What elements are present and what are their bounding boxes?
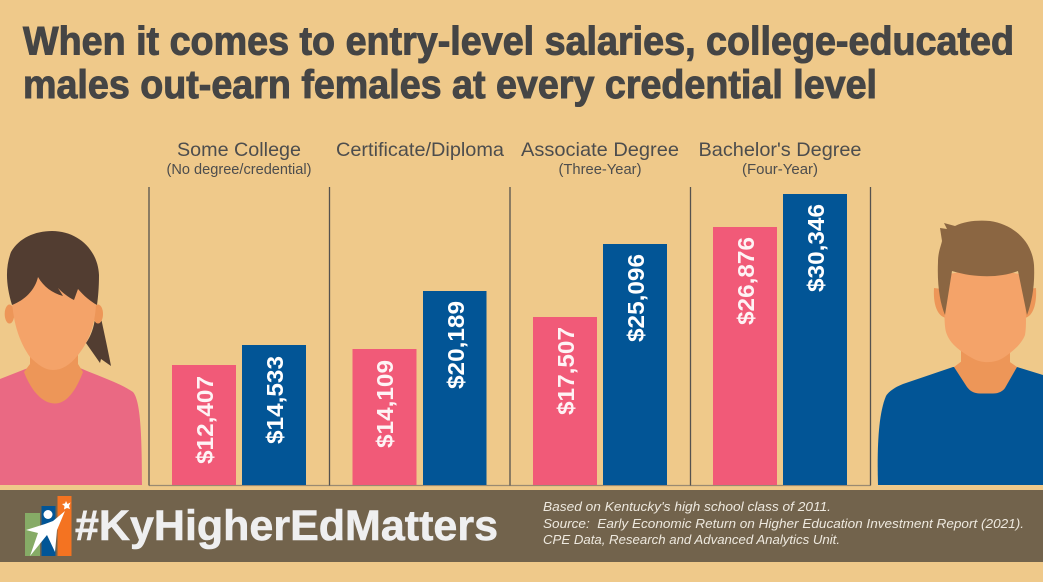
- category headings: (Three-Year): [558, 162, 642, 178]
- category headings: Associate Degree: [521, 139, 679, 161]
- source note: Based on Kentucky's high school class of 2011.: [543, 499, 831, 514]
- bar value labels: $20,189: [443, 301, 469, 389]
- bar chart: [149, 187, 870, 486]
- footer band: [0, 490, 1043, 562]
- icon: Kentucky higher education logo: [25, 496, 72, 556]
- title: males out-earn females at every credential level: [23, 63, 877, 107]
- bar value labels: $30,346: [803, 204, 829, 292]
- title: [23, 20, 1014, 107]
- category headings: Bachelor's Degree: [698, 139, 862, 161]
- category headings: (No degree/credential): [166, 162, 312, 178]
- source note: Source: Early Economic Return on Higher Education Investment Report (2021).: [543, 516, 1024, 531]
- bar value labels: $14,533: [262, 356, 288, 444]
- hashtag: #KyHigherEdMatters: [75, 502, 498, 550]
- icon: female figure: [0, 231, 142, 485]
- category headings: [166, 139, 862, 178]
- category headings: (Four-Year): [742, 162, 818, 178]
- bar value labels: $12,407: [192, 376, 218, 464]
- icon: male figure: [878, 221, 1043, 485]
- category headings: Certificate/Diploma: [336, 139, 504, 161]
- bar value labels: $26,876: [733, 237, 759, 325]
- bar value labels: $14,109: [372, 360, 398, 448]
- bar value labels: $17,507: [553, 327, 579, 415]
- source note: [543, 499, 1024, 547]
- source note: CPE Data, Research and Advanced Analytics Unit.: [543, 532, 840, 547]
- bar value labels: [192, 204, 829, 464]
- bar value labels: $25,096: [623, 254, 649, 342]
- title: When it comes to entry-level salaries, college-educated: [23, 20, 1014, 64]
- category headings: Some College: [177, 139, 301, 161]
